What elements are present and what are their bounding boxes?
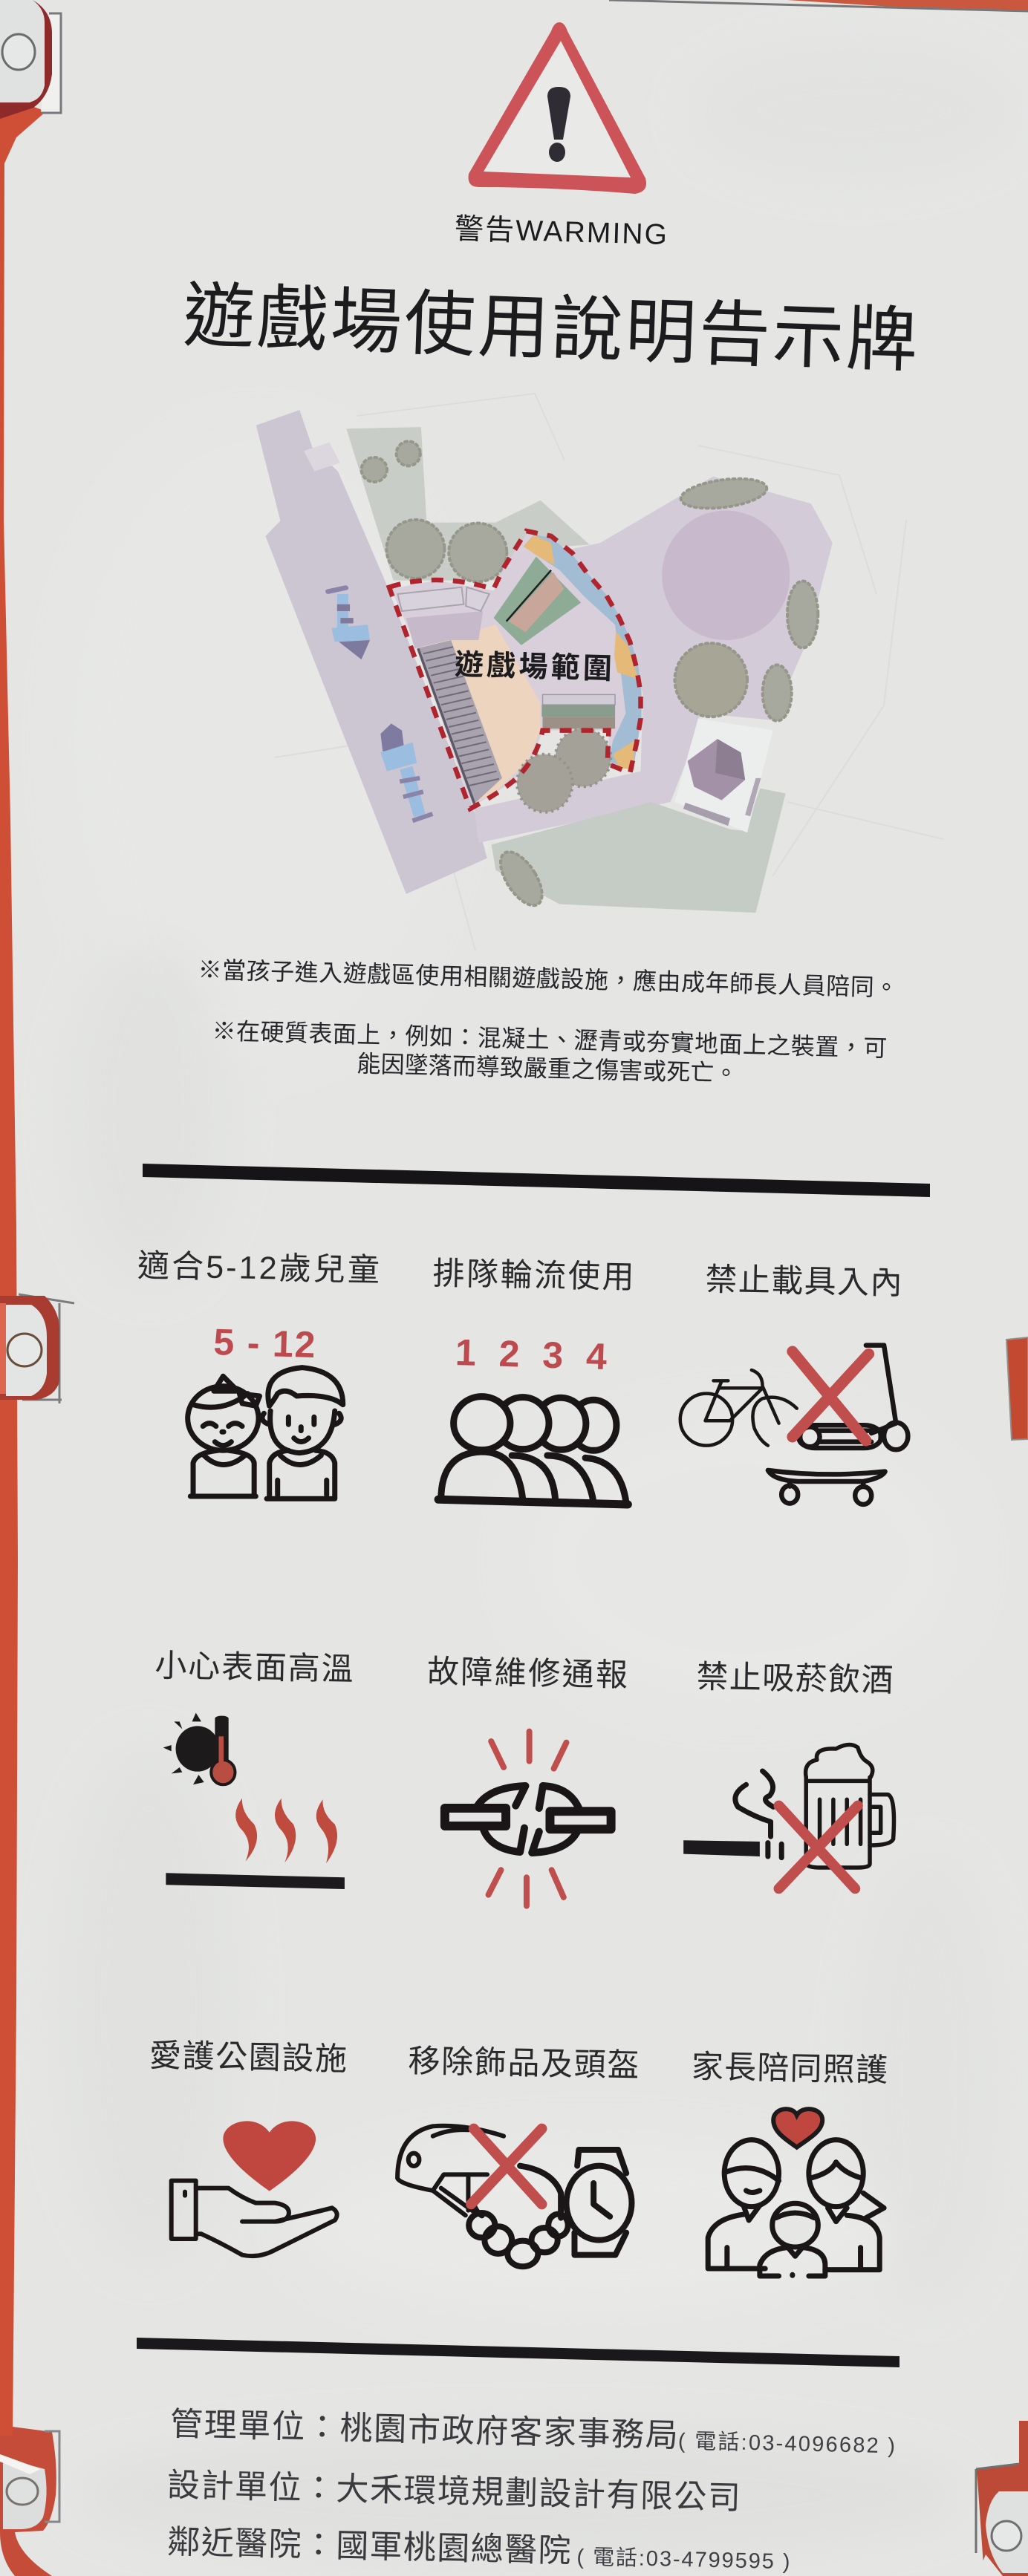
cell: care for facilities (149, 2038, 347, 2256)
icon: broken chain (445, 1732, 611, 1906)
faint plan lines (275, 394, 943, 950)
bottom left bracket (0, 2427, 59, 2576)
note text 2 (212, 1017, 888, 1087)
trees (362, 441, 818, 910)
middle right bracket (1006, 1337, 1028, 1440)
equipment (325, 585, 432, 821)
middle left bracket (0, 1294, 74, 1403)
label: 排隊輪流使用 (432, 1256, 634, 1296)
right unit (542, 694, 615, 705)
icon: warning triangle (469, 22, 646, 194)
footer: design unit: 設計單位：大禾環境規劃設計有限公司 (167, 2467, 741, 2517)
icon: two children (188, 1368, 343, 1499)
cell: remove accessories (397, 2044, 640, 2266)
icon: hand holding heart (172, 2121, 337, 2256)
label: 適合5-12歲兒童 (137, 1248, 380, 1288)
footer: nearby hospital: 鄰近醫院：國軍桃園總醫院 (167, 2524, 571, 2569)
play area surface (391, 532, 639, 807)
white pavilion box (674, 719, 772, 832)
divider 1 (143, 1164, 930, 1197)
footer: management unit (169, 2406, 895, 2458)
slide (417, 640, 502, 803)
icon: family with heart (708, 2109, 884, 2276)
label: 禁止吸菸飲酒 (696, 1659, 894, 1699)
footer: nearby hospital: ( 電話:03-4799595 ) (576, 2545, 790, 2574)
cell: queue (432, 1256, 634, 1504)
road (256, 410, 487, 894)
cell: parent company (692, 2049, 888, 2276)
cell: report faults (427, 1654, 628, 1906)
icon: helmet, beads and watch crossed (397, 2126, 631, 2266)
label: 故障維修通報 (427, 1654, 628, 1694)
label: 禁止載具入內 (705, 1262, 902, 1302)
icon: cigarette and beer crossed (683, 1745, 894, 1888)
green unit (493, 557, 581, 645)
site plan map (256, 394, 943, 950)
label: 愛護公園設施 (149, 2038, 347, 2078)
map drawing (256, 410, 833, 913)
plaza (475, 477, 833, 843)
lower trees (556, 728, 611, 786)
note text 2: ※在硬質表面上，例如：混凝土、瀝青或夯實地面上之裝置，可 (212, 1017, 888, 1062)
label: 移除飾品及頭盔 (408, 2044, 640, 2084)
icon: bicycle, scooter, skateboard crossed (680, 1346, 908, 1504)
title: 遊戲場使用說明告示牌 (182, 276, 919, 381)
cell: hot surface (154, 1648, 354, 1889)
playground boundary (389, 531, 641, 809)
age number: 5 - 12 (213, 1321, 316, 1366)
bottom right bracket (976, 2421, 1028, 2576)
top left bracket (0, 0, 61, 119)
frame: left red edge (0, 104, 46, 2436)
queue numbers: 1 2 3 4 (455, 1331, 608, 1377)
bottom lawn (492, 789, 786, 913)
note text 1: ※當孩子進入遊戲區使用相關遊戲設施，應由成年師長人員陪同。 (198, 956, 899, 1001)
warning label: 警告WARMING (454, 213, 668, 251)
footer: management unit: ( 電話:03-4096682 ) (678, 2429, 895, 2458)
map label: 遊戲場範圍 (454, 649, 612, 685)
ribbon (524, 535, 642, 772)
cell: no vehicles (680, 1262, 908, 1504)
footer: management unit: 管理單位：桃園市政府客家事務局 (169, 2406, 678, 2454)
note text 2: 能因墜落而導致嚴重之傷害或死亡。 (357, 1050, 738, 1087)
cell: suitable age (137, 1248, 380, 1499)
icon: four people in line (438, 1397, 628, 1504)
top lawn (346, 427, 590, 581)
frame: top right edge (609, 0, 1028, 11)
label: 小心表面高溫 (154, 1648, 354, 1688)
icon: sun, thermometer, heat waves (163, 1713, 345, 1889)
footer: nearby hospital (167, 2524, 790, 2574)
label: 家長陪同照護 (692, 2049, 888, 2089)
cell: no smoking or drinking (683, 1659, 894, 1888)
divider 2 (137, 2338, 900, 2367)
